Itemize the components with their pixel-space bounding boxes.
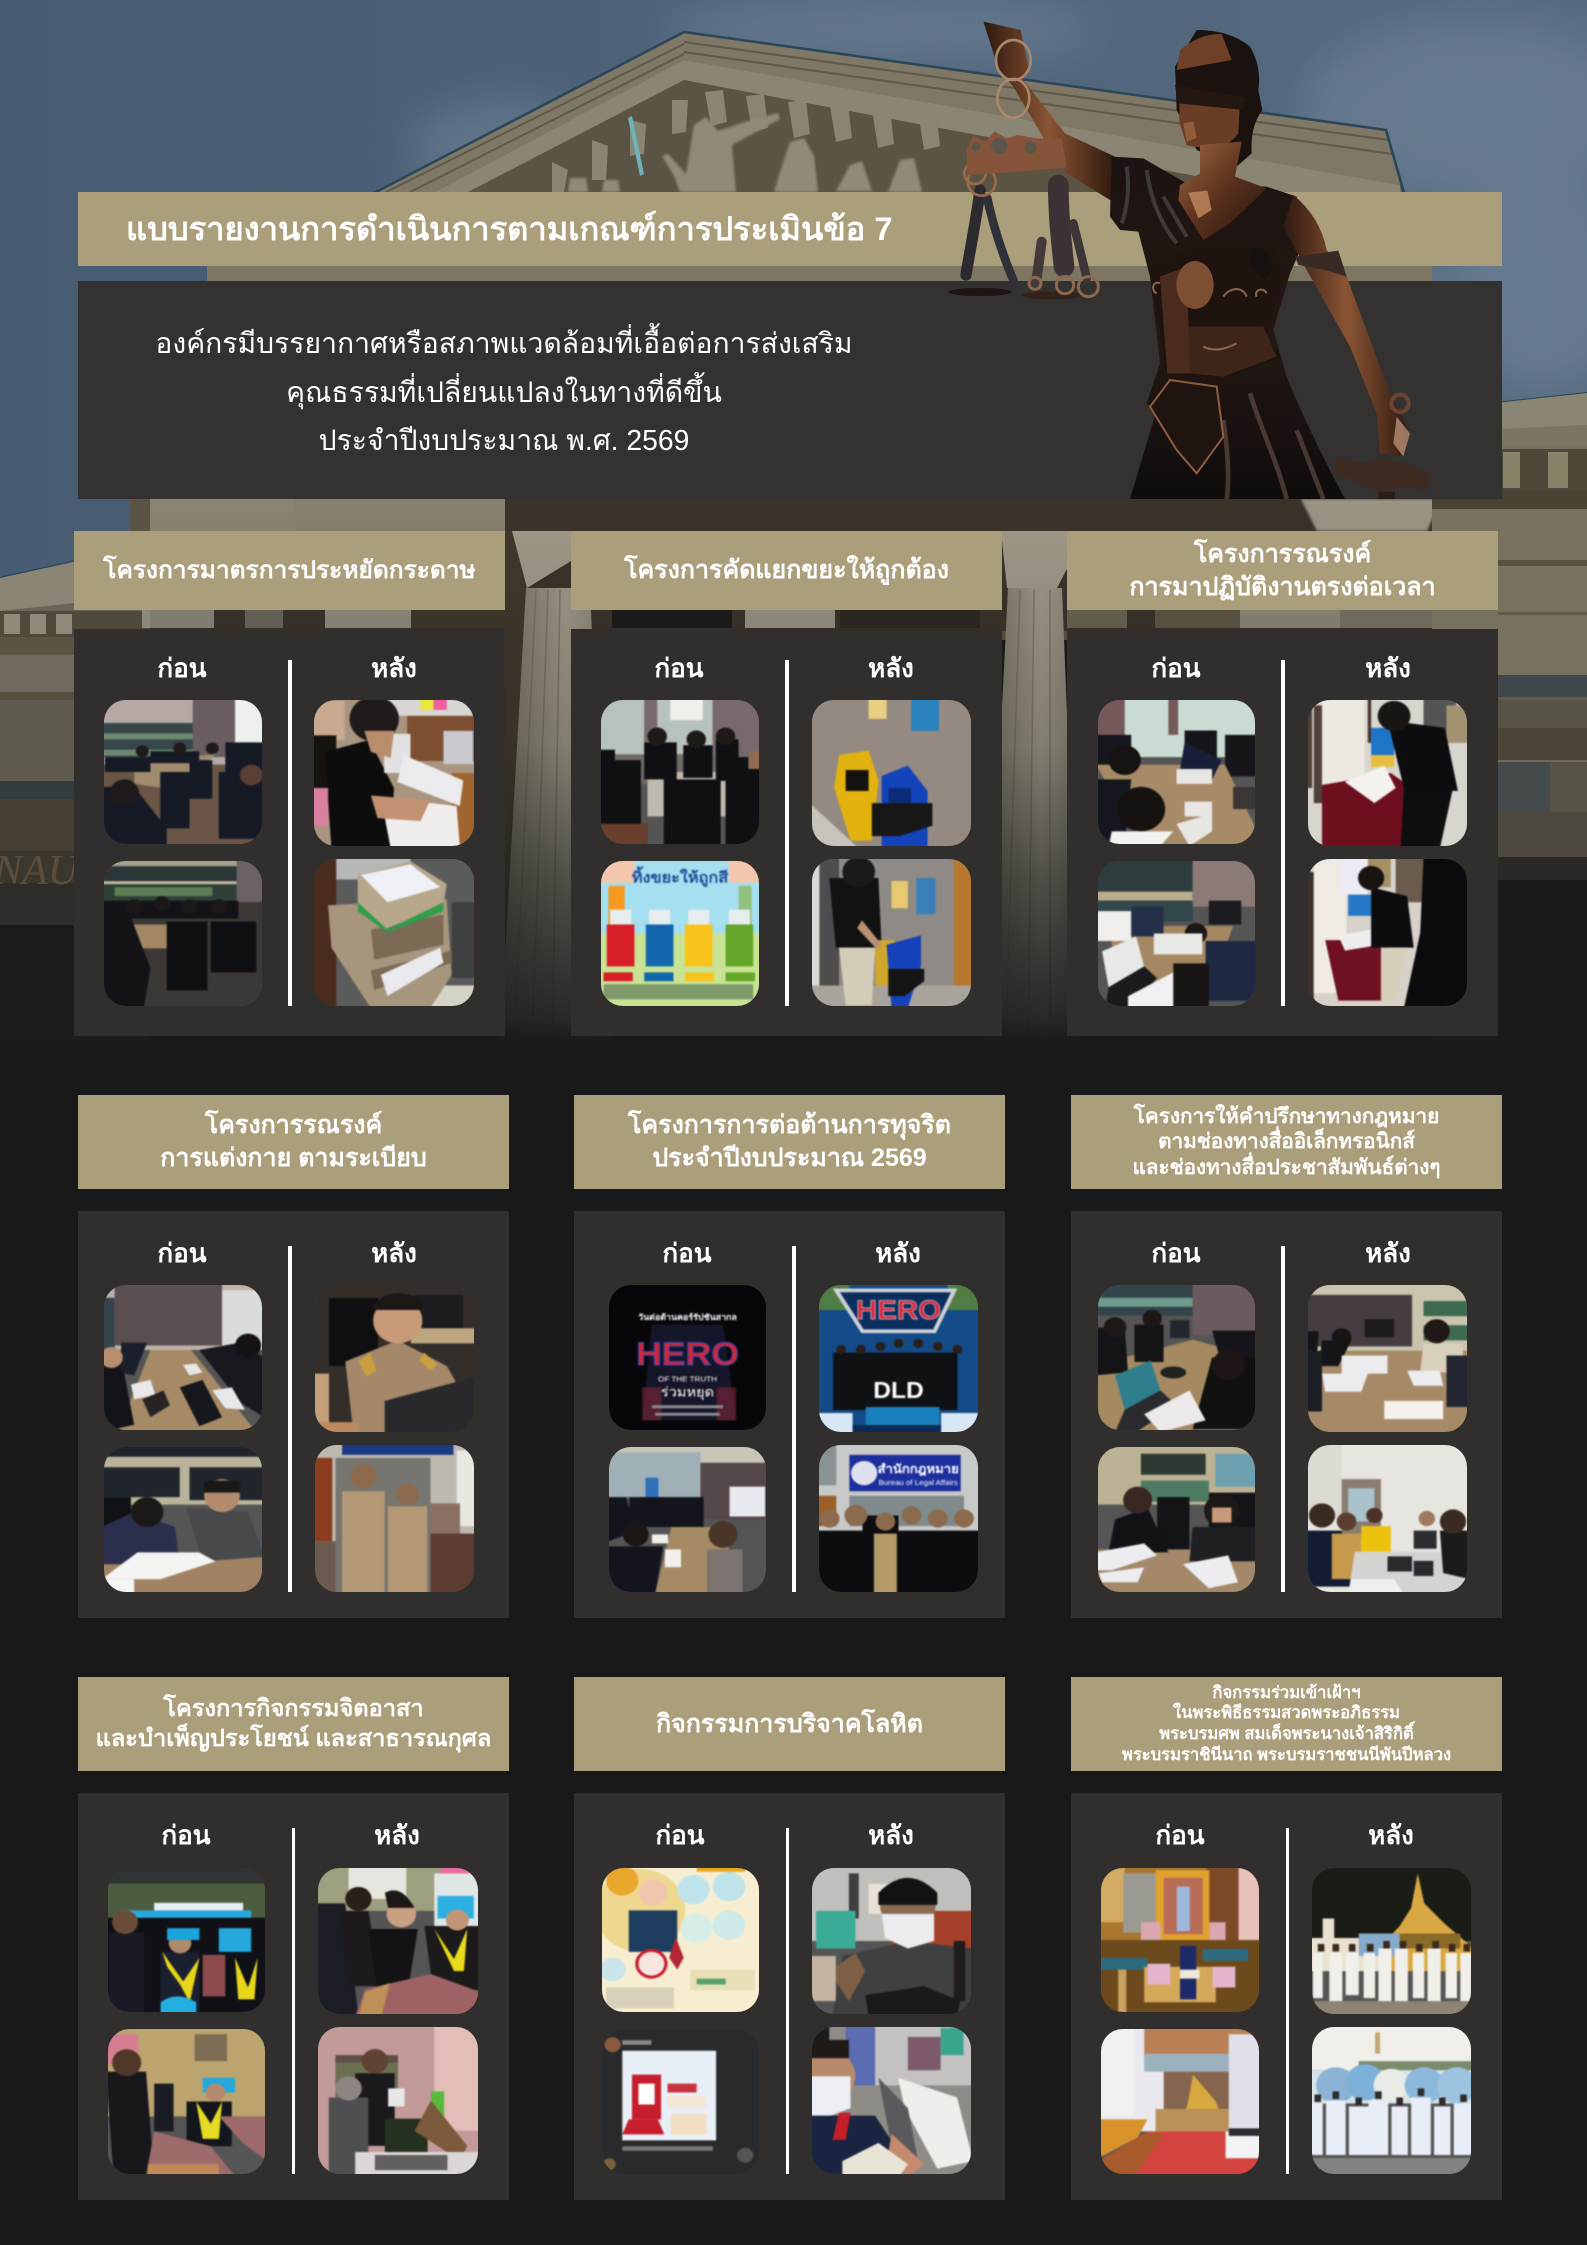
rings <box>964 40 1031 196</box>
raised arm <box>983 22 1115 202</box>
photo: consultation and laptop <box>1098 1285 1255 1430</box>
label: before: ก่อน <box>654 653 704 683</box>
neck and chest <box>1178 142 1267 240</box>
label: before: ก่อน <box>1151 653 1201 683</box>
photo: meeting room <box>104 700 262 844</box>
label: before: ก่อน <box>157 1238 207 1268</box>
blindfold <box>1175 85 1245 110</box>
label: after: หลัง <box>371 1238 417 1268</box>
panel: paper saving <box>74 531 505 1036</box>
box: before and after <box>74 629 505 1036</box>
heading: royal ceremony: พระบรมราชินีนาถ พระบรมราชชนนีพันปีหลวง <box>1122 1745 1451 1764</box>
heading: dress code campaign <box>78 1095 509 1189</box>
photo: officials with wreaths <box>1312 2027 1471 2174</box>
photo: legal bureau group: สำนักกฎหมาย <box>878 1463 959 1477</box>
photo: volunteers under tent <box>108 1868 265 2012</box>
heading: paper saving: โครงการมาตรการประหยัดกระดาษ <box>103 557 476 584</box>
heading: royal ceremony: กิจกรรมร่วมเข้าเฝ้าฯ <box>1212 1683 1361 1702</box>
photo: HERO poster: HERO <box>636 1336 739 1373</box>
entablature and capitals <box>150 499 1440 631</box>
drape highlights <box>1223 393 1323 499</box>
photo: man using bin <box>812 859 971 1006</box>
chains <box>966 185 1087 283</box>
photo: woman reviewing documents <box>314 700 474 846</box>
heading: waste sorting: โครงการคัดแยกขยะให้ถูกต้อง <box>624 556 949 584</box>
photo: officer in uniform at computer <box>315 1285 474 1432</box>
divider <box>288 660 292 1006</box>
heading: volunteer activity: และบำเพ็ญประโยชน์ และสาธารณกุศล <box>96 1726 491 1752</box>
photo: HERO stage group: DLD <box>873 1379 924 1404</box>
box: before and after <box>1067 629 1498 1036</box>
divider <box>1281 1246 1284 1592</box>
heading: blood donation <box>574 1677 1005 1771</box>
heading: punctuality campaign <box>1067 531 1498 610</box>
right wing <box>1432 393 1587 860</box>
hair <box>1175 30 1262 167</box>
label: after: หลัง <box>875 1238 921 1268</box>
heading: dress code campaign: โครงการรณรงค์ <box>205 1111 382 1139</box>
label: after: หลัง <box>868 653 914 683</box>
divider <box>1281 660 1284 1006</box>
left wing <box>0 545 150 930</box>
box: before and after <box>1071 1211 1502 1618</box>
photo: sort waste poster <box>601 861 759 1006</box>
divider <box>786 1828 789 2174</box>
photo: blood donation infographic <box>602 1868 759 2012</box>
label: after: หลัง <box>374 1820 420 1850</box>
photo: signing at red table <box>1308 700 1467 846</box>
label: before: ก่อน <box>157 653 207 683</box>
pediment figures <box>568 113 922 192</box>
photo: grand palace at night <box>1312 1868 1471 2014</box>
heading: volunteer activity: โครงการกิจกรรมจิตอาสา <box>163 1696 424 1722</box>
photo: donor selfie <box>812 2027 971 2174</box>
photo: legal bureau group <box>819 1445 978 1592</box>
photo: eggs at activity booth <box>108 2029 265 2174</box>
heading: waste sorting <box>571 531 1002 610</box>
heading: blood donation: กิจกรรมการบริจาคโลหิต <box>656 1710 923 1738</box>
breastplate <box>1148 243 1283 380</box>
photo: table with papers <box>1098 700 1255 844</box>
scale beam <box>967 132 1067 175</box>
box: before and after <box>1071 1793 1502 2200</box>
heading: punctuality campaign: การมาปฏิบัติงานตรงต่อเวลา <box>1129 572 1436 600</box>
photo: HERO poster: ร่วมหยุด <box>661 1384 714 1400</box>
panel: legal advice <box>1071 1095 1502 1618</box>
box: before and after <box>574 1211 1005 1618</box>
label: after: หลัง <box>371 653 417 683</box>
face <box>1179 93 1240 148</box>
heading: anti corruption <box>574 1095 1005 1189</box>
panel: volunteer activity <box>78 1677 509 2200</box>
subtitle text: องค์กรมีบรรยากาศหรือสภาพแวดล้อมที่เอื้อต่อการส่งเสริม <box>155 327 853 359</box>
torso and dress <box>1110 157 1345 499</box>
pediment frieze <box>435 60 1404 215</box>
photo: HERO poster <box>609 1285 766 1430</box>
divider <box>288 1246 292 1592</box>
panel: anti corruption <box>574 1095 1005 1618</box>
photo: royal altar <box>1101 1868 1259 2012</box>
heading: royal ceremony <box>1071 1677 1502 1771</box>
label: after: หลัง <box>1365 653 1411 683</box>
divider <box>292 1828 295 2174</box>
panel: dress code campaign <box>78 1095 509 1618</box>
label: after: หลัง <box>1365 1238 1411 1268</box>
pediment cornice <box>376 32 1400 192</box>
box: before and after <box>78 1793 509 2200</box>
photo: legal bureau group: Bureau of Legal Affairs <box>878 1478 958 1487</box>
heading: volunteer activity <box>78 1677 509 1771</box>
modillions <box>552 90 940 192</box>
central columns <box>500 531 530 1045</box>
subtitle text: คุณธรรมที่เปลี่ยนแปลงในทางที่ดีขึ้น <box>286 376 722 408</box>
label: after: หลัง <box>868 1820 914 1850</box>
photo: two officers standing <box>315 1445 474 1592</box>
photo: donor with mask <box>812 1868 971 2014</box>
sword hilt <box>1335 458 1430 492</box>
photo: visiting elderly patient <box>318 2027 478 2174</box>
scale pans <box>948 288 1012 296</box>
photo: yellow and blue bins <box>812 700 971 846</box>
heading: legal advice: และช่องทางสื่อประชาสัมพันธ์ต่างๆ <box>1132 1156 1441 1179</box>
heading: paper saving <box>74 531 505 610</box>
heading: legal advice: โครงการให้คำปรึกษาทางกฎหมาย <box>1134 1105 1439 1128</box>
photo: two women reading <box>1098 1447 1255 1592</box>
photo: HERO poster: OF THE TRUTH <box>658 1375 717 1383</box>
title bar <box>78 192 1502 266</box>
divider <box>792 1246 796 1592</box>
subtitle box <box>78 281 1502 499</box>
heading: dress code campaign: การแต่งกาย ตามระเบียบ <box>160 1144 427 1172</box>
photo: long meeting table <box>104 1285 262 1430</box>
photo: meeting chairs <box>104 861 262 1006</box>
photo: temple interior <box>1101 2029 1259 2174</box>
fade to dark <box>150 500 1432 1045</box>
photo: meeting room with curtain <box>1308 1285 1467 1432</box>
subtitle text <box>155 323 853 456</box>
heading: legal advice: ตามช่องทางสื่ออิเล็กทรอนิกส์ <box>1158 1130 1415 1153</box>
right arm <box>1283 195 1410 457</box>
photo: group meeting <box>601 700 759 844</box>
photo: sort waste poster: ทิ้งขยะให้ถูกสี <box>632 866 729 888</box>
photo: white consultation room <box>1308 1445 1467 1592</box>
divider <box>785 660 788 1006</box>
label: before: ก่อน <box>1155 1820 1205 1850</box>
photo: meeting with screen <box>609 1447 766 1592</box>
label: before: ก่อน <box>655 1820 705 1850</box>
panel: blood donation <box>574 1677 1005 2200</box>
photo: signing with colleague <box>1308 859 1467 1006</box>
heading: anti corruption: โครงการการต่อต้านการทุจริต <box>628 1111 951 1139</box>
sleeve drape <box>1122 167 1187 243</box>
panel: waste sorting <box>571 531 1002 1036</box>
heading: punctuality campaign: โครงการรณรงค์ <box>1194 540 1371 568</box>
heading: royal ceremony: ในพระพิธีธรรมสวดพระอภิธรรม <box>1173 1703 1400 1722</box>
heading: anti corruption: ประจำปีงบประมาณ 2569 <box>652 1144 927 1172</box>
heading: legal advice <box>1071 1095 1502 1189</box>
box: before and after <box>574 1793 1005 2200</box>
photo: meeting and laptop <box>1098 861 1255 1006</box>
photo: paper recycling cart <box>314 859 474 1006</box>
photo: two officers at desk <box>104 1447 262 1592</box>
title text: แบบรายงานการดำเนินการตามเกณฑ์การประเมินข้อ 7 <box>126 210 893 247</box>
heading: royal ceremony: พระบรมศพ สมเด็จพระนางเจ้าสิริกิติ์ <box>1159 1724 1414 1743</box>
subtitle text: ประจำปีงบประมาณ พ.ศ. 2569 <box>319 424 689 456</box>
photo: blood donation chat post <box>602 2029 759 2174</box>
statue of Lady Justice <box>948 22 1430 499</box>
photo: handing out eggs <box>318 1868 478 2014</box>
box: before and after <box>78 1211 509 1618</box>
building mass <box>130 32 1432 640</box>
label: before: ก่อน <box>662 1238 712 1268</box>
photo: HERO stage group <box>819 1285 978 1432</box>
photo: HERO poster: วันต่อต้านคอร์รัปชันสากล <box>638 1312 737 1322</box>
panel: punctuality campaign <box>1067 531 1498 1036</box>
panel: royal ceremony <box>1071 1677 1502 2200</box>
divider <box>1286 1828 1289 2174</box>
box: before and after <box>571 629 1002 1036</box>
label: before: ก่อน <box>161 1820 211 1850</box>
photo: HERO stage group: HERO <box>856 1295 941 1326</box>
label: before: ก่อน <box>1151 1238 1201 1268</box>
label: after: หลัง <box>1368 1820 1414 1850</box>
